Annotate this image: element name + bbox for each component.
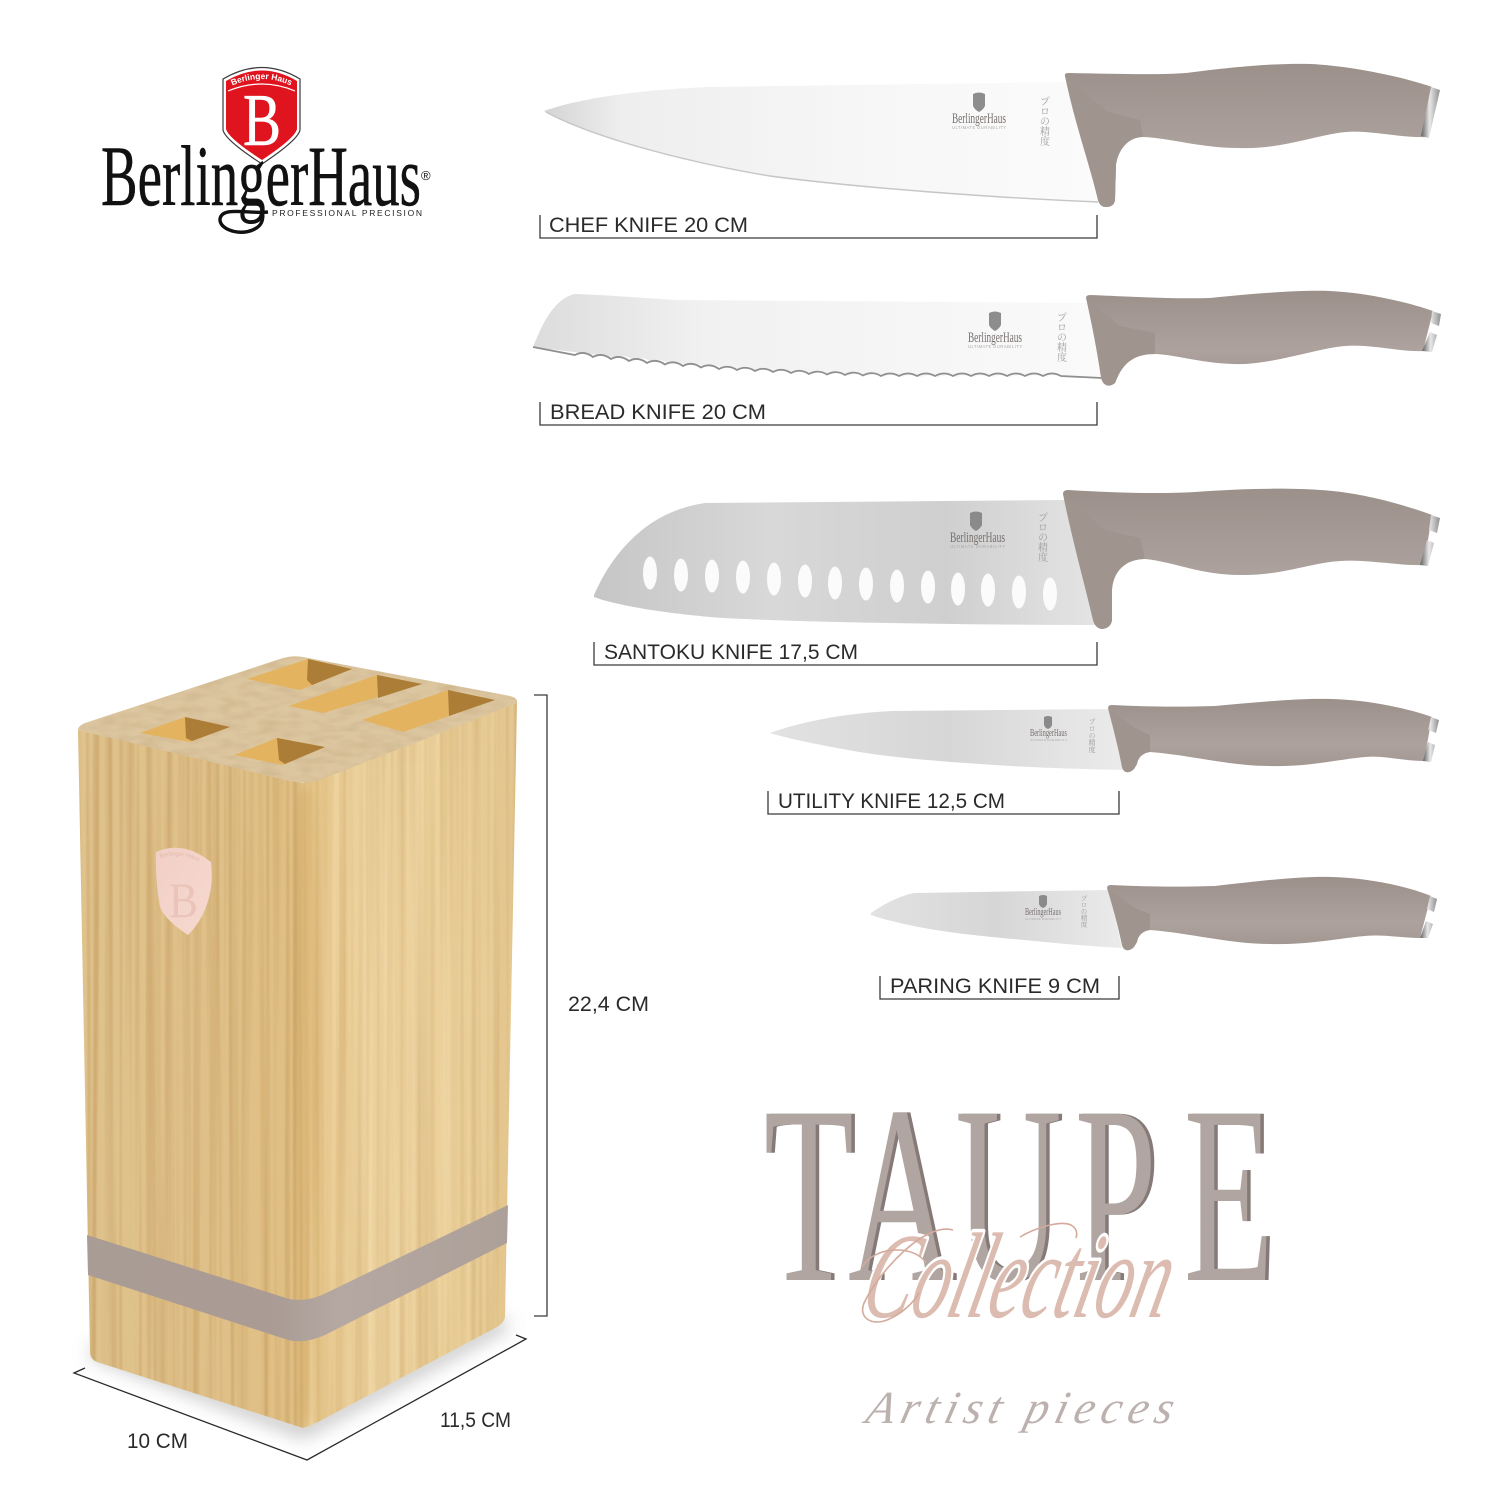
- right face: [295, 695, 525, 1435]
- label: santoku knife: [594, 641, 1097, 665]
- dimension: depth and width: 11,5 CM: [440, 1409, 511, 1432]
- collection title: [764, 1054, 1274, 1434]
- blade marking: [950, 512, 1048, 562]
- handle: [1108, 699, 1432, 772]
- top surface: [78, 656, 518, 783]
- bolster facet: [1067, 79, 1143, 207]
- slot 4: [140, 717, 230, 742]
- knife: santoku: [594, 489, 1440, 629]
- end cap: [1421, 87, 1440, 138]
- blade marking: ULTIMATE DURABILITY: [950, 544, 1005, 549]
- wordmark: ®: [421, 168, 431, 183]
- blade marking: BerlingerHaus: [952, 111, 1006, 127]
- bolster facet: [1087, 300, 1155, 386]
- Artist pieces tagline: Artist pieces: [858, 1383, 1180, 1434]
- handle: [1063, 489, 1432, 629]
- label: chef knife: [540, 214, 1097, 238]
- slot 5: [234, 738, 325, 765]
- block shadow: [92, 1322, 505, 1430]
- blade marking: プロの精度: [1054, 312, 1066, 362]
- blade marking: ULTIMATE DURABILITY: [1025, 917, 1061, 921]
- logo: Berlinger Haus: [101, 66, 431, 234]
- end cap: [1422, 311, 1441, 352]
- label: santoku knife: SANTOKU KNIFE 17,5 CM: [604, 641, 858, 664]
- rose gold badge: B: [169, 872, 198, 928]
- dimension: depth and width: [74, 1335, 526, 1460]
- wordmark: BerlingerHaus: [101, 128, 421, 224]
- blade: [871, 890, 1122, 948]
- wordmark: [101, 128, 431, 232]
- slot 3: [362, 690, 495, 732]
- blade edge: [546, 112, 1098, 202]
- blade marking: プロの精度: [1038, 96, 1050, 146]
- label: utility knife: [768, 790, 1119, 814]
- rose gold badge: Berlinger Haus: [160, 852, 200, 861]
- icon: red shield: B: [243, 80, 281, 162]
- bolster facet: [1065, 497, 1145, 629]
- blade marking: プロの精度: [1088, 718, 1096, 754]
- blade marking: BerlingerHaus: [968, 330, 1022, 346]
- blade: [594, 500, 1096, 625]
- handle: [1065, 64, 1432, 207]
- icon: red shield: [222, 66, 301, 164]
- dimension: height: [534, 695, 649, 1316]
- blade: [533, 294, 1102, 378]
- blade marking: [952, 92, 1050, 146]
- end cap: [1420, 515, 1440, 566]
- end cap: [1423, 717, 1439, 762]
- icon: red shield: Berlinger Haus: [230, 74, 292, 86]
- knife: chef: [544, 64, 1440, 207]
- handle: [1107, 877, 1431, 950]
- bolster facet: [1110, 710, 1150, 772]
- blade marking: BerlingerHaus: [1030, 728, 1067, 739]
- knife: bread: [533, 291, 1441, 386]
- blade marking: [1030, 716, 1096, 754]
- wordmark: PROFESSIONAL PRECISION: [272, 208, 422, 218]
- label: utility knife: UTILITY KNIFE 12,5 CM: [778, 790, 1005, 813]
- bolster facet: [1109, 890, 1150, 950]
- blade marking: ULTIMATE DURABILITY: [1030, 738, 1067, 742]
- script swashes: [862, 1223, 1077, 1322]
- handle: [1086, 291, 1433, 386]
- blade marking: プロの精度: [1036, 512, 1048, 562]
- label: bread knife: [540, 401, 1097, 425]
- TAUPE heading: TAUPE: [764, 1054, 1274, 1335]
- Collection script: Collection: [851, 1209, 1190, 1344]
- blade marking: ULTIMATE DURABILITY: [952, 125, 1006, 130]
- blade marking: BerlingerHaus: [950, 530, 1005, 546]
- blade marking: プロの精度: [1080, 895, 1087, 929]
- dimension: height: 22,4 CM: [568, 993, 649, 1016]
- knife block: [78, 656, 522, 1458]
- blade marking: BerlingerHaus: [1025, 907, 1061, 918]
- dimension: depth and width: 10 CM: [127, 1430, 188, 1453]
- blade: [544, 82, 1100, 203]
- knife: utility: [770, 699, 1439, 772]
- label: paring knife: PARING KNIFE 9 CM: [890, 975, 1100, 998]
- slot 2: [289, 675, 422, 713]
- blade marking: [1025, 895, 1087, 929]
- blade marking: [968, 312, 1066, 362]
- end cap: [1420, 896, 1437, 938]
- slot 1: [247, 659, 352, 690]
- label: chef knife: CHEF KNIFE 20 CM: [549, 214, 748, 237]
- left face: [70, 720, 310, 1440]
- serrated edge: [533, 347, 1102, 378]
- blade marking: ULTIMATE DURABILITY: [968, 344, 1022, 349]
- label: bread knife: BREAD KNIFE 20 CM: [550, 401, 766, 424]
- taupe band: [87, 1205, 508, 1341]
- knife: paring: [871, 877, 1437, 950]
- blade: [770, 709, 1124, 770]
- rose gold badge: [156, 848, 212, 935]
- rounded front edge: [299, 790, 309, 1420]
- granton holes: [643, 556, 1057, 610]
